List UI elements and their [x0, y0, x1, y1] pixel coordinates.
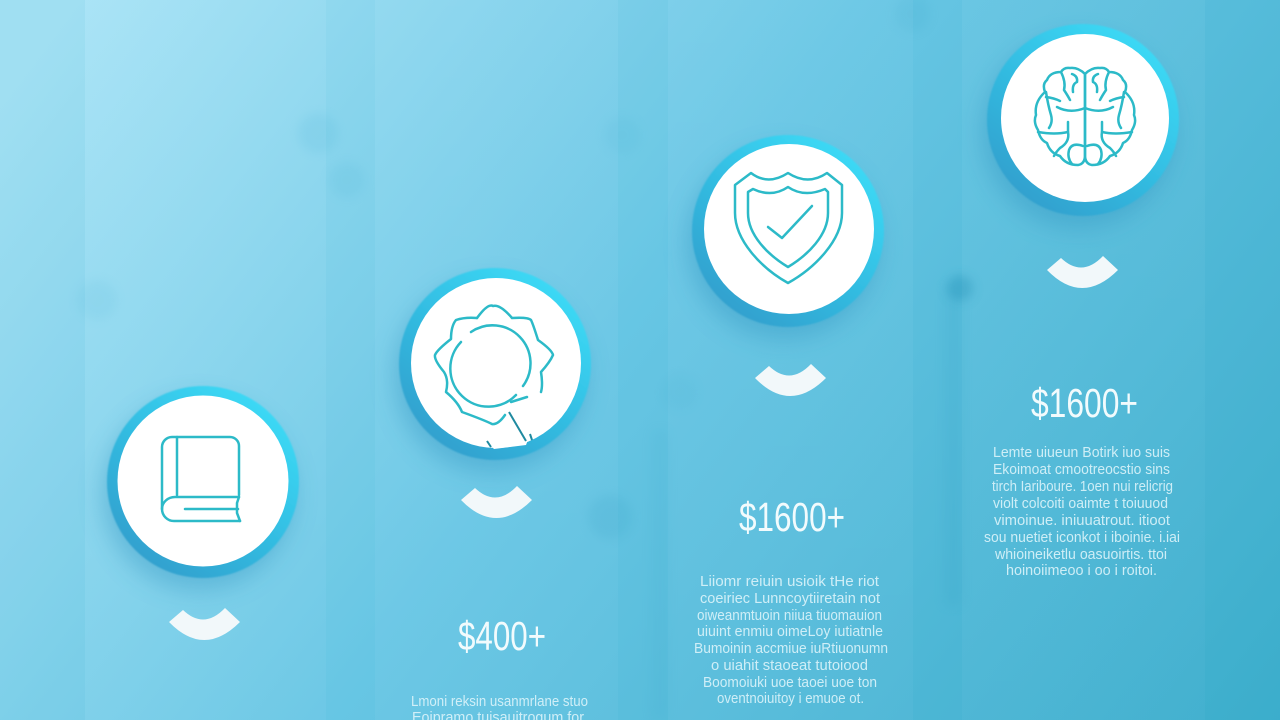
price: step 3: $1600+	[739, 494, 845, 540]
icon: shield with check	[735, 173, 842, 283]
text block: step 4: Ekoimoat cmootreocstio sins	[993, 461, 1170, 478]
circle badge: step 1	[107, 386, 299, 578]
circle badge: step 2	[399, 268, 591, 460]
text block: step 4: Lemte uiueun Botirk iuo suis	[993, 444, 1170, 461]
text block: step 3: Liiomr reiuin usioik tHe riot	[700, 573, 880, 590]
text block: step 3: Boomoiuki uoe taoei uoe ton	[703, 674, 877, 691]
text block: step 4: violt colcoiti oaimte t toiuuod	[993, 495, 1168, 512]
text block: step 4: sou nuetiet iconkot i iboinie. i.iai	[984, 529, 1180, 546]
text block: step 4: whioineiketlu oasuoirtis. ttoi	[994, 546, 1167, 563]
text block: step 3: o uiahit staoeat tutoiood	[711, 657, 868, 674]
panel: step 4 brain	[962, 0, 1205, 720]
text block: step 4: tirch Iariboure. 1oen nui relicrig	[992, 478, 1173, 495]
price: step 2: $400+	[458, 613, 546, 659]
text block: step 3: oventnoiuitoy i emuoe ot.	[717, 690, 864, 707]
text block: step 2	[411, 693, 588, 720]
price: step 4: $1600+	[1031, 380, 1138, 426]
icon: brain	[1035, 68, 1135, 165]
circle badge: step 3	[692, 135, 884, 327]
panel: step 1 book	[85, 0, 326, 720]
text block: step 3: coeiriec Lunncoytiiretain not	[700, 590, 881, 607]
text block: step 4	[984, 444, 1180, 579]
text block: step 3: Bumoinin accmiue iuRtiuonumn	[694, 640, 888, 657]
arc marker: step 2	[461, 486, 532, 518]
arc marker: step 1	[169, 608, 240, 640]
icon: award rosette	[435, 306, 553, 447]
text block: step 3: oiweanmtuoin niiua tiuomauion	[697, 607, 882, 624]
text block: step 4: hoinoiimeoo i oo i roitoi.	[1006, 562, 1157, 579]
text block: step 3: uiuint enmiu oimeLoy iutiatnle	[697, 623, 883, 640]
icon: book	[162, 437, 240, 521]
arc marker: step 3	[755, 364, 826, 396]
text block: step 4: vimoinue. iniuuatrout. itioot	[994, 512, 1171, 529]
arc marker: step 4	[1047, 256, 1118, 288]
panel: step 2 badge	[375, 0, 618, 720]
text block: step 2: Lmoni reksin usanmrlane stuo	[411, 693, 588, 710]
panel: step 3 shield	[668, 0, 913, 720]
text block: step 3	[694, 573, 888, 707]
circle badge: step 4	[987, 24, 1179, 216]
